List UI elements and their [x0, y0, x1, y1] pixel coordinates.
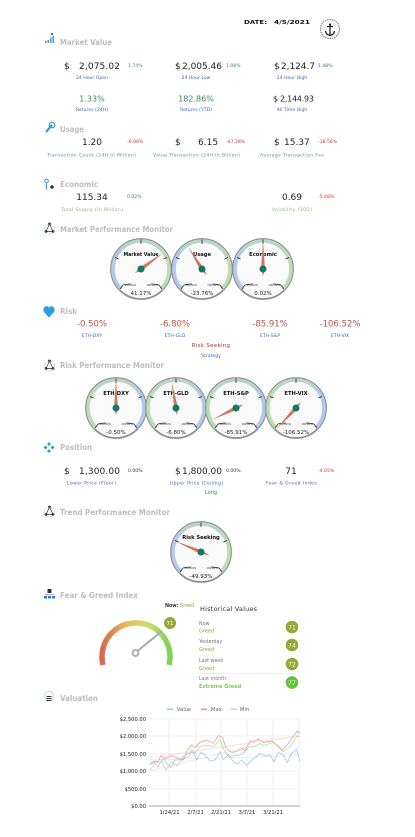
icon: wrench [46, 122, 55, 132]
icon: org chart [44, 589, 55, 598]
gauge: economic: 0.02% [254, 291, 272, 297]
usage metrics: Value Transaction (24H In Billion) [153, 152, 240, 158]
position metrics: 1,300.00 [79, 467, 120, 477]
historical values: Greed [199, 666, 214, 672]
heading: risk performance monitor: Risk Performance Monitor [60, 361, 164, 370]
date: 4/5/2021 [274, 20, 311, 26]
usage metrics: -47.28% [226, 139, 246, 145]
fear and greed gauge: 71 [166, 621, 174, 627]
market value metrics: 1.48% [318, 63, 333, 69]
gauge: market value: 41.17% [131, 291, 151, 297]
risk metrics [77, 320, 360, 359]
economic metrics: 0.02% [127, 194, 142, 200]
economic metrics: Volatility (30D) [272, 207, 312, 213]
gauge: risk seeking: -49.93% [190, 574, 212, 580]
historical values: Last week [199, 658, 223, 664]
risk metrics: -6.80% [160, 320, 190, 330]
historical values: 74 [288, 642, 296, 650]
icon: heart [43, 306, 55, 318]
heading: usage: Usage [60, 125, 84, 134]
icon: anchor logo [320, 20, 340, 38]
line chart: valuation: $1,500.00 [120, 752, 146, 758]
usage metrics [46, 138, 338, 158]
gauge: eth-gld: -6.80% [166, 430, 186, 436]
historical values: Yesterday [198, 639, 222, 645]
usage metrics: 6.15 [198, 138, 218, 148]
market value metrics: 2,005.46 [182, 62, 222, 72]
risk metrics: -106.52% [320, 320, 360, 330]
risk metrics: ETH-VIX [331, 333, 349, 339]
line chart: valuation: $0.00 [131, 804, 146, 810]
risk metrics: ETH-GLD [165, 333, 186, 339]
gauge: economic: Economic [249, 252, 277, 258]
gauge: eth-vix: ETH-VIX [284, 391, 308, 397]
usage metrics: 1.20 [82, 138, 102, 148]
icon: position arrows [44, 442, 54, 453]
market value metrics: $ [64, 62, 70, 72]
gauge: eth-vix: -106.52% [283, 430, 309, 436]
market value metrics [64, 62, 333, 113]
icon: market value bars [45, 33, 54, 43]
position metrics: 0.00% [128, 468, 143, 474]
historical values: Extreme Greed [199, 684, 242, 690]
historical values: Greed [199, 628, 214, 634]
position metrics: 71 [285, 467, 297, 477]
market value metrics: $ [274, 62, 280, 72]
historical values: 71 [288, 624, 296, 632]
usage metrics: -6.98% [127, 139, 144, 145]
economic metrics: -5.48% [318, 194, 335, 200]
market value metrics: 182.86% [178, 94, 214, 104]
fear and greed gauge: Greed [180, 603, 194, 609]
gauge: eth-dxy: ETH-DXY [103, 391, 129, 397]
line chart: valuation: 2/7/21 [187, 810, 204, 816]
position metrics: Fear & Greed Index [266, 480, 317, 486]
market value metrics: 1.08% [226, 63, 241, 69]
market value metrics: 2,124.7 [281, 62, 315, 72]
position metrics: Lower Price (Floor) [67, 480, 116, 486]
line chart: valuation: $2,000.00 [120, 734, 146, 740]
icon: network [44, 360, 54, 371]
market value metrics: Returns (YTD) [180, 107, 212, 113]
market value metrics: $ [273, 94, 278, 104]
historical values: 77 [288, 680, 296, 687]
market value metrics: 24 Hour Open [76, 75, 108, 81]
fear and greed gauge: Now: [165, 603, 179, 609]
line chart: valuation: 2/21/21 [211, 810, 231, 816]
gauge: eth-s&p [206, 378, 266, 438]
gauge: eth-s&p: ETH-S&P [223, 391, 249, 397]
line chart: valuation [120, 707, 300, 816]
economic metrics [60, 193, 335, 213]
risk metrics: ETH-S&P [260, 333, 280, 339]
gauge: usage [172, 239, 232, 299]
position metrics [64, 467, 335, 496]
gauge: market value: Market Value [124, 252, 159, 258]
icon: network [44, 506, 54, 517]
gauge: economic [233, 239, 293, 299]
risk metrics: ETH-DXY [82, 333, 102, 339]
position metrics: -4.05% [318, 468, 335, 474]
usage metrics: Average Transaction Fee [260, 152, 324, 158]
gauge: eth-s&p: -85.91% [225, 430, 247, 436]
usage metrics: -18.56% [318, 139, 338, 145]
economic metrics: Total Supply (In Million) [60, 207, 123, 213]
icon: valuation coin [44, 692, 54, 701]
gauge: risk seeking [171, 522, 231, 582]
position metrics: Upper Price (Ceiling) [170, 480, 223, 486]
economic metrics: 0.69 [282, 193, 302, 203]
economic metrics: 115.34 [76, 193, 108, 203]
gauge: eth-vix [266, 378, 326, 438]
gauge: eth-dxy [86, 378, 146, 438]
heading: risk: Risk [60, 307, 78, 316]
position metrics: Long [205, 490, 217, 496]
icon: key [45, 179, 54, 190]
risk metrics: -0.50% [77, 320, 107, 330]
usage metrics: Transaction Count (24H In Million) [46, 152, 136, 158]
historical values: Historical Values [200, 605, 258, 613]
gauge: market value [111, 239, 171, 299]
gauge: eth-gld [146, 378, 206, 438]
risk metrics: Risk Seeking [192, 343, 230, 349]
historical values [198, 605, 298, 690]
line chart: valuation: 3/7/21 [239, 810, 255, 816]
line chart: valuation: $1,000.00 [120, 769, 146, 775]
position metrics: $ [64, 467, 70, 477]
heading: fear & greed index: Fear & Greed Index [60, 591, 138, 600]
chart legend: Value [177, 707, 191, 713]
usage metrics: $ [175, 138, 181, 148]
market value metrics: All Time High [277, 107, 307, 113]
historical values: Greed [199, 647, 214, 653]
position metrics: 1,800.00 [182, 467, 222, 477]
usage metrics: 15.37 [284, 138, 310, 148]
position metrics: $ [175, 467, 181, 477]
date: DATE: [244, 20, 267, 26]
heading: market value: Market Value [60, 38, 112, 47]
chart legend: Min [240, 707, 249, 713]
market value metrics: 2,075.02 [79, 62, 120, 72]
historical values: 72 [288, 662, 296, 668]
gauge: eth-gld: ETH-GLD [163, 391, 189, 397]
position metrics: 0.00% [226, 468, 241, 474]
usage metrics: $ [274, 138, 280, 148]
gauge: eth-dxy: -0.50% [106, 430, 126, 436]
risk metrics: -85.91% [252, 320, 288, 330]
historical values: Now [199, 621, 210, 627]
date [244, 20, 311, 26]
line chart: valuation: 3/21/21 [263, 810, 283, 816]
market value metrics: 24 Hour Low [182, 75, 211, 81]
fear and greed gauge [102, 603, 194, 665]
gauge: usage: Usage [193, 252, 211, 258]
heading: market performance monitor: Market Performance Monitor [60, 225, 173, 234]
market value metrics: 2,144.93 [280, 94, 314, 104]
heading: position: Position [60, 443, 92, 452]
heading: economic: Economic [60, 180, 98, 189]
chart legend: Max [211, 707, 222, 713]
market value metrics: $ [175, 62, 181, 72]
line chart: valuation: $2,500.00 [120, 717, 146, 723]
market value metrics: 1.33% [79, 94, 105, 104]
heading: trend performance monitor: Trend Performance Monitor [60, 508, 170, 517]
market value metrics: 1.74% [128, 63, 143, 69]
line chart: valuation: $500.00 [125, 787, 146, 793]
heading: valuation: Valuation [60, 694, 98, 703]
risk metrics: Strategy [201, 353, 221, 359]
market value metrics: Returns (24H) [76, 107, 108, 113]
chart legend [167, 707, 249, 713]
icon: network [44, 223, 54, 234]
market value metrics: 24 Hour High [277, 75, 307, 81]
gauge: risk seeking: Risk Seeking [182, 535, 220, 541]
gauge: usage: -23.76% [191, 291, 213, 297]
historical values: Last month [199, 676, 226, 682]
line chart: valuation: 1/24/21 [160, 810, 180, 816]
